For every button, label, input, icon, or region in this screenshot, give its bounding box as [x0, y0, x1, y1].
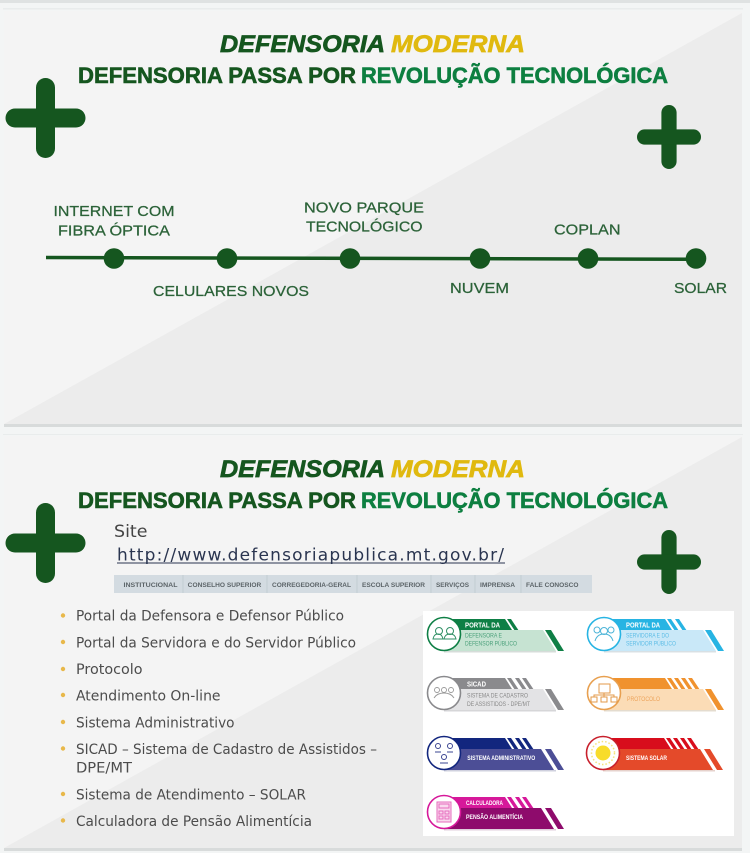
website navigation bar: SERVIÇOS [436, 582, 469, 589]
badge: portal da defensora: PORTAL DA [465, 622, 500, 630]
panel: system badges [423, 611, 734, 836]
bullet list: Portal da Servidora e do Servidor Público [76, 636, 356, 652]
badge: portal da servidora: SERVIDOR PÚBLICO [626, 641, 676, 648]
timeline labels: CELULARES NOVOS [153, 283, 309, 300]
badge: calculadora de pensão alimentícia: CALCULADORA [466, 801, 504, 807]
website navigation bar: FALE CONOSCO [526, 582, 579, 589]
website navigation bar: IMPRENSA [480, 582, 515, 589]
bullet list: Sistema de Atendimento – SOLAR [76, 787, 306, 803]
heading: revolução tecnológica: DEFENSORIA PASSA POR [78, 488, 356, 513]
badge: calculadora de pensão alimentícia: PENSÃO ALIMENTÍCIA [466, 813, 524, 821]
badge: calculadora de pensão alimentícia [428, 796, 564, 830]
heading: revolução tecnológica: REVOLUÇÃO TECNOLÓGICA [361, 63, 668, 88]
panel: slide 2 [4, 436, 742, 851]
icon: small plus [637, 105, 701, 169]
title: Defensoria Moderna: DEFENSORIA [220, 456, 385, 483]
badge: sistema solar [586, 736, 723, 772]
timeline [46, 200, 727, 300]
website navigation bar: ESCOLA SUPERIOR [362, 582, 425, 589]
badge: protocolo: PROTOCOLO [627, 697, 660, 703]
badge: portal da servidora [588, 618, 724, 652]
timeline labels: FIBRA ÓPTICA [58, 222, 170, 240]
bullet list: Protocolo [76, 662, 142, 678]
icon: small plus [637, 530, 701, 594]
badge: portal da servidora: SERVIDORA E DO [626, 634, 669, 640]
badge: sicad: SISTEMA DE CADASTRO [467, 694, 528, 700]
heading: revolução tecnológica: REVOLUÇÃO TECNOLÓGICA [361, 488, 668, 513]
bullet list: Calculadora de Pensão Alimentícia [76, 814, 312, 830]
bullet list: Atendimento On-line [76, 689, 220, 705]
title: Defensoria Moderna: MODERNA [391, 456, 525, 483]
website navigation bar [114, 575, 592, 593]
icon: large plus [6, 503, 86, 583]
badge: sistema administrativo: SISTEMA ADMINISTRATIVO [467, 756, 536, 762]
panel: slide 1 [3, 11, 743, 435]
timeline dots [104, 248, 706, 269]
badge: protocolo [588, 676, 724, 712]
bullet list: DPE/MT [76, 761, 132, 777]
badge: portal da defensora [428, 618, 564, 652]
bullet list: Portal da Defensora e Defensor Público [76, 609, 344, 625]
timeline labels [54, 200, 727, 300]
site url: http://www.defensoriapublica.mt.gov.br/ [117, 546, 504, 566]
timeline labels: TECNOLÓGICO [306, 219, 422, 236]
timeline labels: SOLAR [674, 280, 727, 297]
timeline labels: NUVEM [450, 280, 509, 297]
website navigation bar: CORREGEDORIA-GERAL [272, 582, 351, 589]
badge: portal da defensora: DEFENSOR PÚBLICO [465, 641, 517, 648]
heading: revolução tecnológica [78, 63, 668, 88]
title: Defensoria Moderna [220, 456, 525, 483]
heading: revolução tecnológica: DEFENSORIA PASSA POR [78, 63, 356, 88]
timeline labels: COPLAN [554, 221, 620, 238]
badge: sistema administrativo [428, 736, 564, 772]
bullet list: SICAD – Sistema de Cadastro de Assistidos – [76, 742, 377, 758]
timeline labels: INTERNET COM [54, 203, 174, 220]
bullet list [61, 609, 377, 830]
timeline labels: NOVO PARQUE [304, 200, 424, 217]
badge: sistema solar: SISTEMA SOLAR [626, 756, 668, 762]
badge: sicad: SICAD [467, 682, 486, 689]
badge: portal da servidora: PORTAL DA [626, 622, 660, 630]
badge: sicad: DE ASSISTIDOS - DPE/MT [467, 702, 530, 708]
badge: sicad [428, 676, 564, 712]
icon: large plus [6, 78, 86, 158]
bullet list: Sistema Administrativo [76, 715, 234, 731]
title: Defensoria Moderna: DEFENSORIA [220, 31, 385, 58]
title: Defensoria Moderna: MODERNA [391, 31, 525, 58]
title: Defensoria Moderna [220, 31, 525, 58]
website navigation bar: INSTITUCIONAL [124, 582, 178, 589]
heading: revolução tecnológica [78, 488, 668, 513]
badge: portal da defensora: DEFENSORA E [465, 634, 502, 640]
site label: Site [114, 522, 148, 541]
website navigation bar: CONSELHO SUPERIOR [188, 582, 262, 589]
